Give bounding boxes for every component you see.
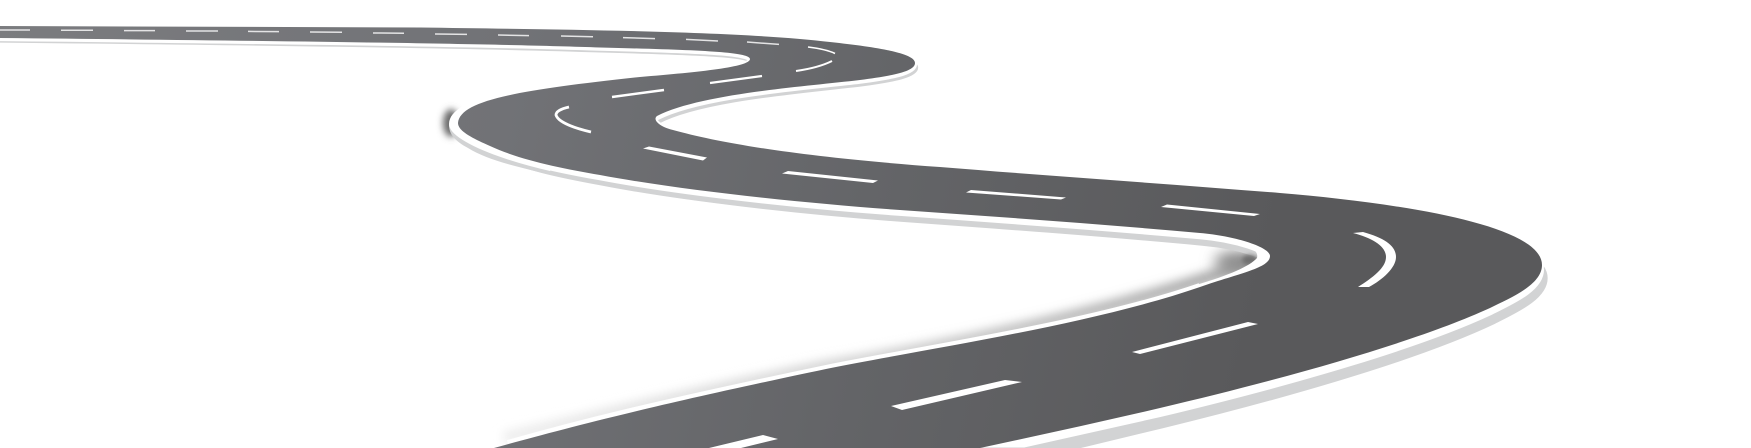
top bend dashes [556, 47, 835, 132]
shadow along the lower inner road edge [504, 251, 1262, 438]
lane markings [0, 30, 1396, 448]
near lane dashes [709, 322, 1258, 448]
middle dashes [643, 146, 1260, 216]
right bend dash [1353, 232, 1396, 287]
shadow at left bend [443, 109, 459, 137]
far lane dashes [0, 30, 779, 44]
kerb shade at inner bend [1242, 255, 1258, 265]
